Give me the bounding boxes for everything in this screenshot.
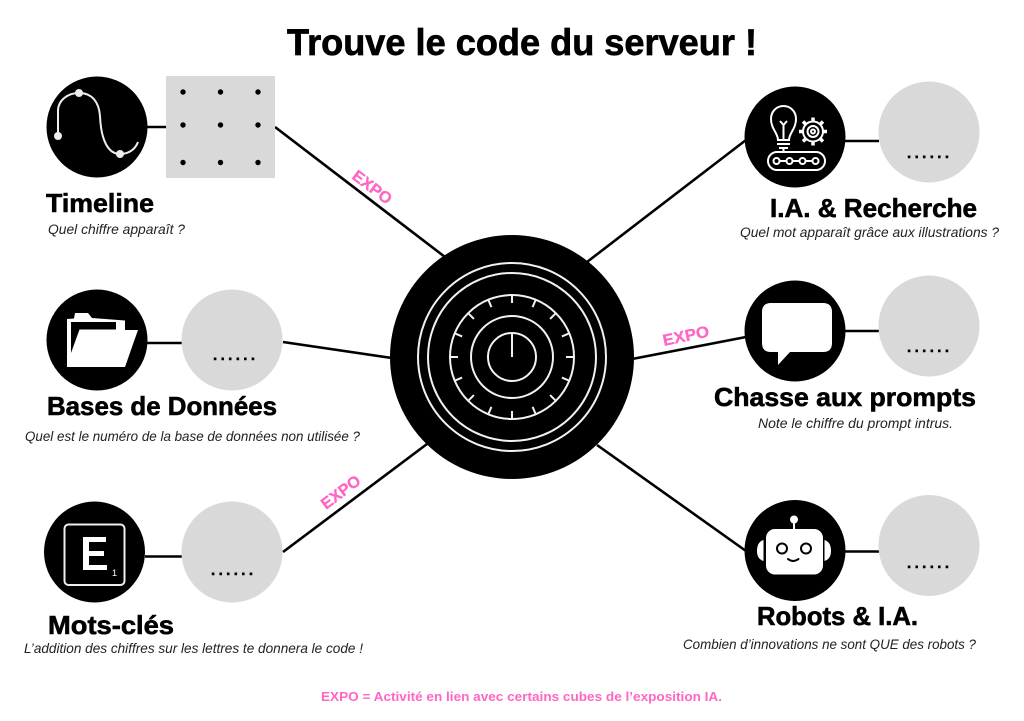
- panel: I.A. & Recherche: [740, 82, 999, 240]
- central safe dial: [390, 235, 634, 479]
- title: Trouve le code du serveur !: [287, 22, 757, 63]
- panel: Mots-clés: [24, 502, 363, 656]
- panel: Robots & I.A.: [683, 495, 980, 652]
- panel: Timeline: [46, 76, 275, 237]
- answer circle: [878, 495, 980, 596]
- heading: Bases de Données: [47, 391, 277, 421]
- EXPO tag: Chasse aux prompts link: EXPO: [661, 324, 711, 350]
- icon: timeline curve: [46, 76, 148, 178]
- panel: Chasse aux prompts: [714, 276, 980, 431]
- answer circle: [182, 502, 282, 602]
- icon: robot: [744, 500, 846, 601]
- answer circle: ......: [213, 347, 255, 364]
- icon: folder: [46, 290, 148, 390]
- heading: Chasse aux prompts: [714, 382, 976, 412]
- icon: scrabble tile: [44, 502, 145, 602]
- footer legend: EXPO = Activité en lien avec certains cubes de l’exposition IA.: [321, 689, 722, 704]
- icon: speech bubble: [744, 280, 846, 382]
- question: Quel chiffre apparaît ?: [48, 221, 185, 237]
- icon: scrabble tile: 1: [112, 568, 117, 578]
- heading: Mots-clés: [48, 610, 174, 640]
- answer circle: ......: [907, 555, 949, 572]
- EXPO tag: Timeline link: EXPO: [349, 168, 395, 208]
- question: Quel mot apparaît grâce aux illustrations ?: [740, 224, 999, 240]
- question: Note le chiffre du prompt intrus.: [758, 415, 953, 431]
- heading: Robots & I.A.: [757, 601, 918, 631]
- answer circle: ......: [211, 562, 253, 579]
- EXPO tag: Mots-clés link: EXPO: [318, 473, 364, 513]
- answer grid of dots: [166, 76, 275, 178]
- heading: Timeline: [46, 188, 154, 218]
- question: Combien d’innovations ne sont QUE des robots ?: [683, 636, 976, 652]
- answer circle: [878, 276, 980, 376]
- panel: Bases de Données: [25, 290, 360, 444]
- answer circle: [878, 82, 980, 182]
- answer circle: ......: [907, 339, 949, 356]
- question: Quel est le numéro de la base de données non utilisée ?: [25, 428, 360, 444]
- heading: I.A. & Recherche: [770, 193, 977, 223]
- question: L’addition des chiffres sur les lettres te donnera le code !: [24, 640, 363, 656]
- icon: bulb, gear and conveyor: [744, 86, 846, 188]
- answer circle: ......: [907, 145, 949, 162]
- answer circle: [182, 290, 282, 390]
